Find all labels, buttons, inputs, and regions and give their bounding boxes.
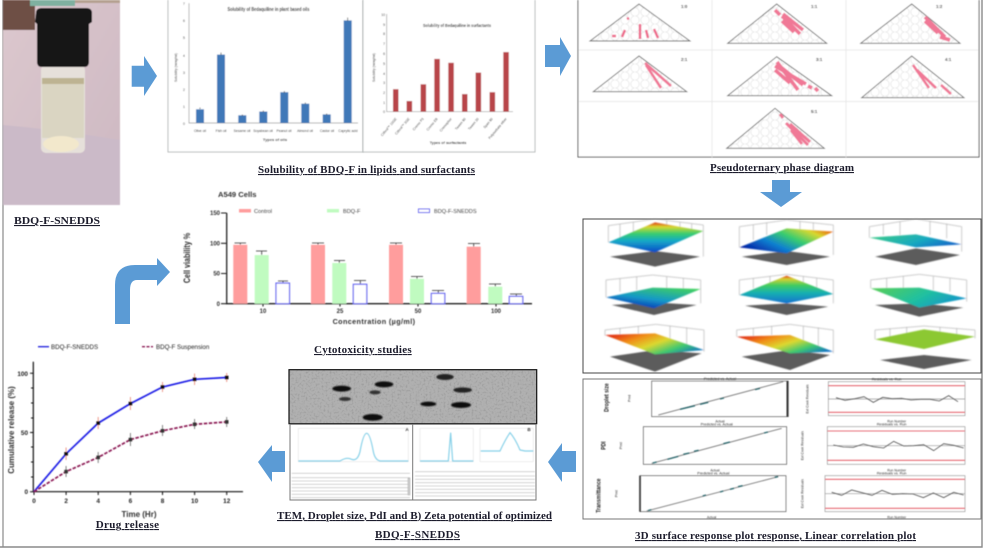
- label: cytotoxicity: Cytotoxicity studies: [314, 344, 412, 356]
- panel: cytotoxicity chart: 100: [491, 309, 502, 315]
- panel: drug release chart: 6: [129, 498, 133, 505]
- y axis captions: Ext Cook Residuals: [800, 479, 804, 508]
- panel: solubility chart in plant based oils: 3: [183, 71, 185, 75]
- row labels: Transmittance: [596, 479, 603, 513]
- panel: solubility chart in surfactants: 4: [383, 72, 385, 76]
- panel: solubility chart in surfactants: 0: [383, 110, 385, 114]
- y axis captions: Pred: [628, 395, 632, 402]
- table B: [415, 472, 535, 496]
- ternary 1:2: [861, 4, 960, 43]
- plot row 1: [608, 219, 962, 267]
- residuals row 3: Residuals vs. Run: [877, 471, 906, 475]
- legend: SNEDDS: BDQ-F-SNEDDS: [51, 344, 98, 351]
- panel: drug release chart: 12: [223, 498, 231, 505]
- label: drug release: Drug release: [96, 519, 159, 531]
- ternary 4:1: [862, 56, 964, 98]
- panel: solubility chart in plant based oils: 6: [183, 19, 185, 23]
- predicted vs actual row 3: Predicted vs. Actual: [697, 472, 730, 476]
- ternary 1:1: [728, 4, 827, 43]
- panel: solubility chart in surfactants: Cremo P3: [412, 117, 425, 131]
- arrow: plots to TEM: [548, 443, 576, 482]
- y axis captions: Run Number: [887, 516, 907, 520]
- panel: cytotoxicity chart: 25: [337, 309, 344, 315]
- y axis captions: Actual: [715, 419, 725, 423]
- panel: cytotoxicity chart: 0: [217, 302, 221, 308]
- panel: cytotoxicity chart: [182, 190, 532, 326]
- line: SNEDDS: [34, 378, 227, 492]
- label: surface and correlation plots: 3D surface response plot response, Linear correlation plot: [635, 530, 916, 542]
- panel: solubility chart in plant based oils: Solubility (mmg/ml): [174, 53, 178, 82]
- panel: solubility chart in plant based oils: Caprylic acid: [338, 129, 358, 133]
- panel: solubility chart in surfactants: Cremophor: [439, 116, 453, 133]
- predicted vs actual row 3: [640, 472, 786, 512]
- panel: vial photograph: [3, 0, 120, 205]
- panel: solubility chart in surfactants: 2: [383, 91, 385, 95]
- bars: control: [233, 245, 481, 304]
- vial liquid: [42, 80, 84, 138]
- bars: oils: [196, 20, 352, 123]
- panel: 3D surface response plots: [583, 219, 981, 373]
- panel: solubility chart in surfactants: 7: [383, 42, 385, 46]
- predicted vs actual row 1: [652, 377, 788, 417]
- legend: Control: [254, 209, 272, 215]
- ternary 1:1: 1:1: [811, 4, 818, 9]
- panel: drug release chart: Cumulative release (%): [7, 386, 16, 474]
- panel: solubility chart in surfactants: Cithrol™ 3GE: [394, 117, 411, 136]
- panel: solubility chart in surfactants: Cremo EB: [426, 117, 439, 132]
- panel: cytotoxicity chart: Cell viability %: [182, 232, 192, 283]
- y axis captions: Ext Cook Residuals: [806, 384, 810, 414]
- panel: solubility chart in plant based oils: 1: [183, 105, 185, 109]
- row labels: PDI: [601, 441, 608, 450]
- panel: cytotoxicity chart: 10: [260, 309, 267, 315]
- axes: [33, 362, 243, 492]
- chart A: droplet size: [298, 427, 409, 462]
- panel: solubility chart in surfactants: Span 80: [483, 117, 494, 129]
- arrow: vial to solubility: [132, 56, 157, 96]
- panel: solubility chart in plant based oils: Almond oil: [297, 129, 313, 133]
- y axis captions: Run Number: [887, 419, 907, 423]
- panel: solubility chart in surfactants: 9: [383, 23, 385, 27]
- y axis captions: Actual: [707, 516, 717, 520]
- panel: TEM micrograph: [289, 370, 537, 424]
- arrow: TEM to drug release: [258, 445, 285, 482]
- predicted vs actual row 2: [643, 423, 787, 464]
- panel: drug release chart: 50: [21, 430, 28, 437]
- y axis captions: Run Number: [887, 469, 907, 473]
- legend: BDQ-F: [343, 209, 361, 215]
- panel: drug release chart: 100: [17, 371, 28, 378]
- label: phase diagram: Pseudoternary phase diagram: [710, 162, 854, 174]
- panel: cytotoxicity chart: A549 Cells: [218, 190, 256, 199]
- arrow: drug release to cytotoxicity: [115, 258, 170, 324]
- panel: solubility chart in surfactants: Polysorbate ether: [488, 116, 508, 140]
- vial cap: [35, 8, 92, 67]
- panel: solubility chart in surfactants: Solubility (mmg/ml): [372, 53, 376, 82]
- ternary 1:0: 1:0: [681, 4, 688, 9]
- chart A: droplet size: A: [405, 427, 409, 432]
- residuals row 2: Residuals vs. Run: [877, 422, 906, 426]
- legend: BDQ-F-SNEDDS: [434, 209, 477, 215]
- ternary 5:1: 5:1: [811, 109, 818, 114]
- arrow: solubility to phase diagram: [545, 37, 571, 76]
- error bars: [66, 373, 227, 460]
- plot row 3: [605, 324, 975, 372]
- bars: BDQ-F: [255, 255, 502, 304]
- panel: linear correlation and residual plots: [583, 377, 981, 520]
- panel: solubility chart in plant based oils: Castor oil: [320, 129, 334, 133]
- ternary 3:1: [728, 57, 832, 96]
- table A: [292, 473, 410, 498]
- panel: drug release chart: 0: [24, 489, 28, 496]
- panel: drug release chart: 2: [64, 498, 68, 505]
- y axis captions: Pred: [614, 490, 618, 497]
- legend: [239, 209, 477, 215]
- panel: solubility chart in plant based oils: 7: [183, 2, 185, 6]
- panel: solubility chart in plant based oils: 4: [183, 54, 185, 58]
- panel: solubility chart in plant based oils: Peanut oil: [276, 129, 292, 133]
- legend: suspension: BDQ-F Suspension: [156, 344, 210, 351]
- residuals row 1: [828, 377, 965, 416]
- chart B: zeta potential: B: [527, 427, 531, 432]
- axes: [227, 213, 532, 304]
- panel: cytotoxicity chart: 50: [415, 309, 422, 315]
- panel: drug release chart: 4: [96, 498, 100, 505]
- ternary 2:1: 2:1: [681, 57, 688, 62]
- ternary 3:1: 3:1: [816, 57, 823, 62]
- panel: cytotoxicity chart: 50: [213, 272, 221, 278]
- panel: solubility chart in plant based oils: Fish oil: [216, 129, 227, 133]
- panel: solubility chart in plant based oils: Soyabean oil: [253, 129, 273, 133]
- residuals row 3: [825, 471, 965, 512]
- panel: solubility chart in plant based oils: 0: [183, 122, 185, 126]
- ternary 2:1: [593, 56, 688, 92]
- error bars: [234, 243, 522, 296]
- panel: solubility chart in plant based oils: 2: [183, 88, 185, 92]
- panel: drug release chart: [7, 344, 243, 519]
- markers: [64, 376, 228, 473]
- line: suspension: [34, 422, 227, 492]
- y axis captions: Ext Cook Residuals: [800, 431, 804, 460]
- bars: surfactants: [393, 52, 509, 112]
- label: solubility: Solubility of BDQ-F in lipids and surfactants: [258, 164, 476, 176]
- bars: BDQ-F-SNEDDS: [276, 283, 523, 304]
- residuals row 2: [827, 422, 965, 464]
- vial glass: [41, 65, 85, 153]
- panel: solubility chart in plant based oils: Olive oil: [194, 129, 206, 133]
- panel: solubility chart in surfactants: [363, 0, 535, 152]
- panel: cytotoxicity chart: Concentration (µg/ml): [333, 317, 416, 326]
- panel: solubility chart in plant based oils: Solubility of Bedaquiline in plant based oils: [228, 7, 310, 13]
- panel: solubility chart in surfactants: Tween 80: [454, 117, 467, 131]
- panel: pseudoternary phase diagrams: [578, 0, 979, 157]
- arrow: phase diagram to surface plots: [760, 180, 802, 207]
- residuals row 1: Residuals vs. Run: [872, 377, 901, 381]
- y axis captions: Actual: [710, 469, 720, 473]
- panel: solubility chart in plant based oils: 5: [183, 36, 185, 40]
- panel: solubility chart in surfactants: 8: [383, 32, 385, 36]
- panel: solubility chart in surfactants: Cithrol™ 10GE: [380, 117, 398, 137]
- panel: drug release chart: Time (Hr): [122, 510, 157, 519]
- panel: drug release chart: 8: [161, 498, 165, 505]
- plot row 2: [606, 274, 967, 317]
- panel: solubility chart in plant based oils: Sesame oil: [234, 129, 251, 133]
- predicted vs actual row 2: Predicted vs. Actual: [701, 423, 733, 427]
- label: vial: BDQ-F-SNEDDS: [14, 215, 100, 227]
- panel: solubility chart in plant based oils: Types of oils: [263, 137, 288, 142]
- ternary 1:2: 1:2: [936, 4, 943, 9]
- panel: solubility chart in surfactants: 1: [383, 101, 385, 105]
- panel: solubility chart in surfactants: Solubility of Bedaquiline in surfactants: [423, 23, 491, 29]
- ternary 1:0: [590, 4, 690, 41]
- chart B: zeta potential: [420, 427, 533, 462]
- label: optimized formulation: BDQ-F-SNEDDS: [375, 529, 460, 541]
- panel: cytotoxicity chart: 100: [210, 242, 221, 248]
- panel: solubility chart in surfactants: Types of surfactants: [430, 141, 466, 145]
- panel: solubility chart in surfactants: 3: [383, 81, 385, 85]
- y axis captions: Pred: [619, 442, 623, 449]
- panel: solubility chart in plant based oils: [168, 0, 363, 152]
- panel: cytotoxicity chart: 150: [210, 211, 221, 217]
- ternary 4:1: 4:1: [945, 57, 952, 62]
- panel: solubility chart in surfactants: 10: [381, 13, 385, 17]
- panel: drug release chart: 10: [191, 498, 199, 505]
- row labels: [596, 383, 611, 513]
- panel: solubility chart in surfactants: Tween 20: [467, 117, 480, 131]
- panel: drug release chart: 0: [32, 498, 36, 505]
- predicted vs actual row 1: Predicted vs. Actual: [704, 377, 736, 381]
- panel: solubility chart in surfactants: 6: [383, 52, 385, 56]
- ternary 5:1: [727, 108, 824, 148]
- label: TEM and droplet size: TEM, Droplet size, PdI and B) Zeta potential of optimized: [277, 510, 552, 522]
- row labels: Droplet size: [604, 383, 611, 412]
- panel: solubility chart in surfactants: 5: [383, 62, 385, 66]
- y axis captions: [614, 384, 907, 520]
- panel: droplet size and zeta potential: [290, 424, 536, 500]
